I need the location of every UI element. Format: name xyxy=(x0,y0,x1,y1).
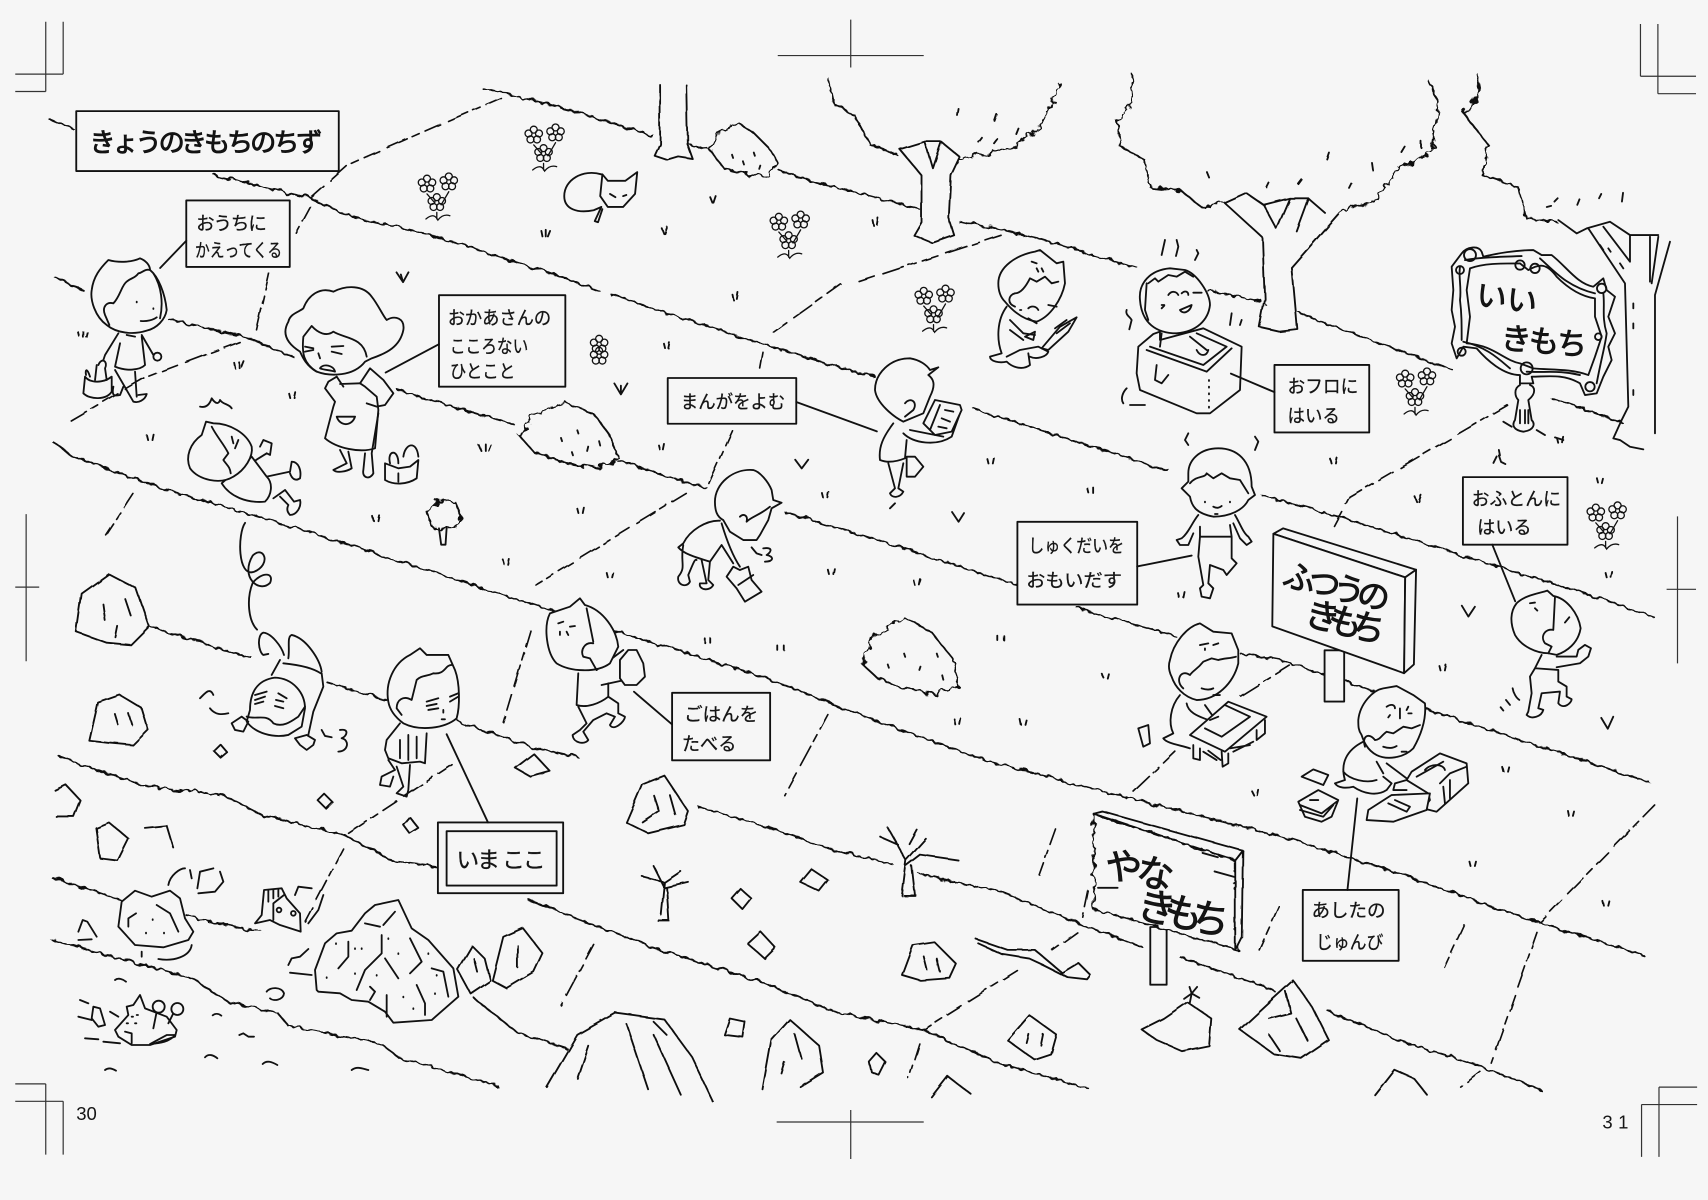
small round tree xyxy=(427,501,462,545)
character: reading child standing xyxy=(875,358,962,508)
label: coming home: おうちに xyxy=(196,213,267,234)
sprout on rock xyxy=(1184,987,1199,1015)
label: eating: ごはんを xyxy=(684,704,758,725)
character: child preparing for tomorrow xyxy=(1298,686,1468,822)
flowers xyxy=(418,124,1626,549)
cat sleeping xyxy=(564,172,637,222)
small doodle above futon label xyxy=(1493,450,1505,464)
dashed field borders xyxy=(71,98,1655,1087)
character: mother xyxy=(285,287,404,477)
tree: left trunk xyxy=(655,85,693,160)
sign: unpleasant feeling: きもち xyxy=(1133,884,1234,945)
label: taking a bath: はいる xyxy=(1288,406,1340,427)
sign: unpleasant feeling xyxy=(1094,812,1243,985)
leaf sprouts xyxy=(396,272,1613,729)
character: sitting child with book xyxy=(990,250,1077,368)
spiky creature xyxy=(78,979,368,1071)
character: child eating xyxy=(546,598,645,743)
label: preparing for tomorrow xyxy=(1303,798,1399,961)
mole peeking out xyxy=(255,888,301,932)
tree: right trunk xyxy=(1558,220,1670,449)
label: taking a bath xyxy=(1231,365,1369,432)
snake xyxy=(976,939,1090,979)
label: coming home xyxy=(160,200,290,268)
title box: きょうのきもちのちず xyxy=(89,127,322,157)
label: remembering homework: おもいだす xyxy=(1026,570,1122,591)
label: mother's careless words: ひとこと xyxy=(450,361,515,382)
rocks left and middle xyxy=(54,574,1427,1102)
page number left: 30 xyxy=(76,1103,97,1124)
character: child in bath xyxy=(1122,240,1242,413)
character: child remembering homework xyxy=(1177,433,1258,598)
bush middle xyxy=(520,403,619,468)
character: tumbling child xyxy=(188,398,300,515)
label: preparing for tomorrow: じゅんび xyxy=(1316,932,1384,953)
sign: good feeling xyxy=(1452,247,1615,440)
page number right: 31 xyxy=(1602,1112,1634,1133)
character: upside-down child xyxy=(200,633,347,752)
tree: third with canopy xyxy=(1118,74,1439,331)
tree: right canopy edge xyxy=(1464,74,1623,222)
sign: good feeling: いい xyxy=(1474,278,1539,321)
character: child cleaning up xyxy=(678,470,782,602)
bush low xyxy=(863,618,959,695)
sign: unpleasant feeling: やな xyxy=(1101,843,1178,898)
sign: normal feeling: ふつうの xyxy=(1279,556,1394,618)
big rocks lower left xyxy=(78,868,458,1023)
label: going to bed xyxy=(1463,477,1567,601)
sign: normal feeling xyxy=(1272,528,1416,702)
bare branch trees xyxy=(643,828,959,920)
label: going to bed: はいる xyxy=(1477,517,1532,538)
sign: good feeling: きもち xyxy=(1499,321,1589,363)
character: frowning child here now xyxy=(380,648,459,797)
tree: second with canopy xyxy=(828,78,1061,243)
terrain ridges xyxy=(49,87,1655,1089)
label: coming home: かえってくる xyxy=(195,240,282,261)
label: going to bed: おふとんに xyxy=(1472,488,1561,509)
label: taking a bath: おフロに xyxy=(1288,376,1358,397)
label: eating xyxy=(634,692,770,760)
label: remembering homework xyxy=(1017,522,1192,605)
label: mother's careless words: おかあさんの xyxy=(448,308,551,329)
basket by mother xyxy=(385,445,418,484)
bush top xyxy=(710,123,778,176)
label: preparing for tomorrow: あしたの xyxy=(1311,900,1386,921)
label: reading manga xyxy=(668,378,877,431)
title box xyxy=(76,111,339,171)
sign: normal feeling: きもち xyxy=(1301,594,1390,652)
character: child coming home xyxy=(83,258,167,402)
grass ticks xyxy=(78,196,1612,905)
label: right here now: いま ここ xyxy=(456,847,546,873)
label: reading manga: まんがをよむ xyxy=(681,392,785,413)
spiral squiggle xyxy=(240,523,271,630)
label: eating: たべる xyxy=(682,734,736,755)
label: mother's careless words: こころない xyxy=(450,336,528,357)
character: child going to bed xyxy=(1501,591,1591,717)
character: child writing at desk xyxy=(1138,623,1267,767)
label: remembering homework: しゅくだいを xyxy=(1028,535,1124,556)
label: mother's careless words xyxy=(386,295,565,387)
label: right here now xyxy=(438,734,563,893)
